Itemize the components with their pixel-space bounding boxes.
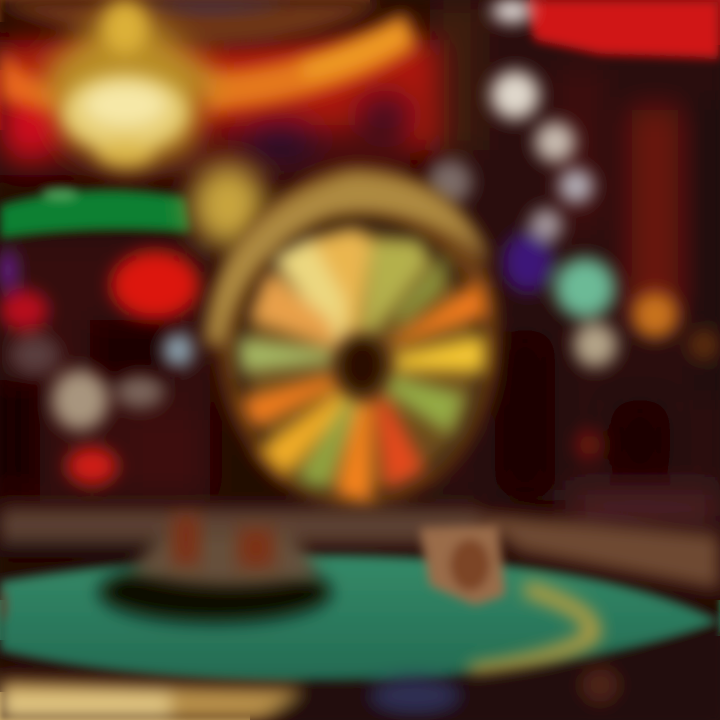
wheel hub	[338, 335, 386, 395]
brown arch top	[0, 0, 385, 46]
dice	[420, 525, 505, 605]
wheel segments	[238, 228, 488, 505]
bokeh lights	[428, 0, 720, 461]
left upper band	[0, 40, 440, 175]
back wall right	[430, 0, 720, 500]
dark area right of wheel	[495, 330, 720, 526]
felt table	[0, 556, 720, 682]
yellow glow beside wheel	[190, 163, 266, 247]
chip stack	[99, 515, 331, 622]
orange glowing swag	[0, 12, 418, 112]
wheel outer rim	[218, 168, 498, 508]
red blob	[111, 251, 199, 319]
green band	[0, 191, 190, 238]
table rail	[0, 508, 720, 590]
small left edge chip	[0, 589, 8, 621]
lower edge	[0, 632, 720, 720]
gold table line	[470, 588, 593, 672]
wheel	[205, 168, 498, 508]
red canopy top right	[525, 0, 720, 58]
left dark lower area	[0, 240, 210, 500]
purple and red left	[0, 250, 193, 485]
chandelier	[40, 0, 215, 172]
